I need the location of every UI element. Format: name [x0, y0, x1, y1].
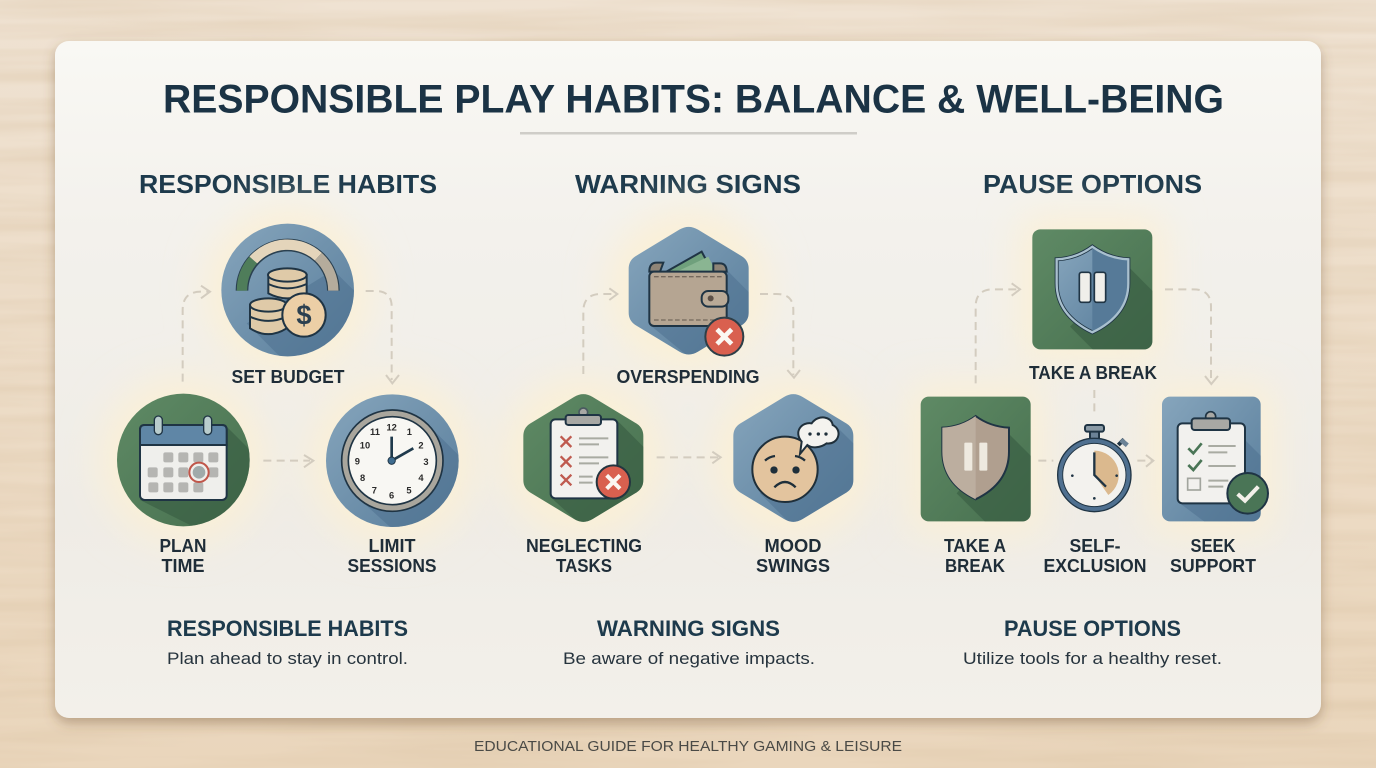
icon: clock — [326, 394, 463, 530]
icon: budget coins — [221, 224, 354, 356]
label: plan time: PLAN — [160, 536, 206, 556]
icon: clipboard neglecting tasks — [523, 394, 644, 522]
icon: clock: 5 — [406, 485, 412, 495]
icon: clock: 2 — [418, 440, 424, 450]
caption: warning signs: Be aware of negative impacts. — [563, 649, 815, 668]
label: overspending: OVERSPENDING — [616, 367, 760, 387]
icon glows — [101, 209, 474, 543]
arrow: overspending to mood — [760, 294, 800, 378]
label: top take a break: TAKE A BREAK — [1029, 363, 1157, 383]
arrow: stopwatch to support — [1137, 455, 1153, 467]
icon glows — [909, 217, 1273, 533]
heading: pause options: PAUSE OPTIONS — [983, 169, 1202, 199]
panel: warning signs — [503, 169, 873, 668]
arrow: plan to budget — [183, 286, 210, 382]
label: limit sessions — [348, 536, 436, 576]
icon: calendar — [117, 394, 260, 527]
label: set budget: SET BUDGET — [232, 367, 344, 387]
icon: stopwatch self-exclusion — [1058, 425, 1131, 512]
arrow: break to stopwatch connector — [1091, 390, 1097, 415]
panel: responsible habits — [101, 169, 474, 668]
caption: warning signs: WARNING SIGNS — [597, 616, 780, 641]
caption: pause options: PAUSE OPTIONS — [1004, 616, 1181, 641]
icon: budget coins: $ — [296, 299, 312, 330]
icon: clock: 8 — [360, 473, 365, 483]
arrow: time to sessions — [263, 455, 313, 467]
icon: clock: 3 — [423, 457, 429, 467]
caption: pause options — [963, 616, 1222, 668]
label: neglecting tasks: TASKS — [556, 556, 612, 576]
caption: warning signs — [563, 616, 815, 668]
label: seek support — [1170, 536, 1256, 576]
diagram: warning cycle — [523, 227, 863, 530]
arrow: left break to top break — [976, 283, 1020, 383]
icon: clock: 4 — [418, 473, 424, 483]
heading: responsible habits: RESPONSIBLE HABITS — [139, 169, 437, 199]
icon: clock: 10 — [360, 440, 370, 450]
icon: clock: 9 — [355, 456, 360, 466]
label: neglecting tasks: NEGLECTING — [526, 536, 642, 556]
icon: clock: 11 — [370, 427, 380, 437]
icon: sad face mood swings — [733, 394, 854, 522]
footer: EDUCATIONAL GUIDE FOR HEALTHY GAMING & LEISURE — [474, 738, 902, 755]
panel: pause options — [909, 169, 1273, 668]
diagram: pause cycle — [921, 229, 1268, 523]
label: mood swings: SWINGS — [756, 556, 830, 576]
arrow: top break to support — [1165, 289, 1218, 384]
label: self-exclusion: SELF- — [1070, 536, 1121, 556]
caption: responsible habits: Plan ahead to stay in control. — [167, 649, 408, 668]
arrow: left break to stopwatch — [1038, 458, 1053, 464]
arrow: budget to sessions — [366, 291, 399, 383]
label: seek support: SUPPORT — [1170, 556, 1256, 576]
label: take a break — [944, 536, 1006, 576]
label: mood swings — [756, 536, 830, 576]
arrow: tasks to mood — [657, 452, 721, 463]
label: mood swings: MOOD — [764, 536, 822, 556]
label: seek support: SEEK — [1190, 536, 1236, 556]
icon: clock: 7 — [372, 485, 377, 495]
label: self-exclusion — [1044, 536, 1146, 576]
icon: clock: 6 — [389, 490, 394, 500]
arrow: tasks to overspending — [583, 288, 617, 374]
label: plan time: TIME — [162, 556, 204, 576]
icon: top shield pause — [1032, 229, 1160, 353]
diagram: habits cycle — [117, 224, 463, 530]
icon: left shield pause — [921, 397, 1037, 523]
icon: wallet overspending — [628, 226, 749, 357]
label: self-exclusion: EXCLUSION — [1044, 556, 1146, 576]
icon glows — [503, 211, 873, 538]
heading: warning signs: WARNING SIGNS — [575, 169, 801, 199]
label: plan time — [160, 536, 206, 576]
title: RESPONSIBLE PLAY HABITS: BALANCE & WELL-BEING — [163, 78, 1224, 122]
label: take a break: BREAK — [945, 556, 1005, 576]
caption: responsible habits — [167, 616, 408, 668]
icon: clock: 12 — [386, 423, 397, 433]
icon: clock: 1 — [407, 427, 412, 437]
label: limit sessions: LIMIT — [368, 536, 416, 556]
caption: pause options: Utilize tools for a healthy reset. — [963, 649, 1222, 668]
label: limit sessions: SESSIONS — [348, 556, 436, 576]
icon: checklist seek support — [1162, 397, 1268, 523]
label: take a break: TAKE A — [944, 536, 1006, 556]
label: neglecting tasks — [526, 536, 642, 576]
caption: responsible habits: RESPONSIBLE HABITS — [167, 616, 408, 641]
